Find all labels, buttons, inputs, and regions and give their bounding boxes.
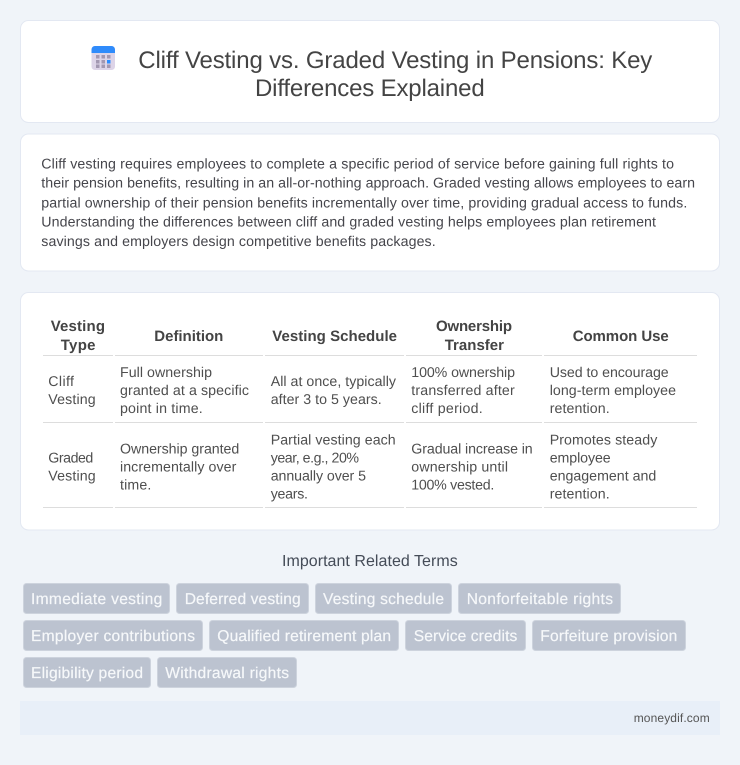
table header row	[51, 318, 669, 354]
table row: graded vesting: incrementally over	[120, 459, 237, 475]
table row: cliff vesting: granted at a specific	[120, 383, 249, 399]
table row: graded vesting: annually over 5	[271, 468, 366, 484]
table row: graded vesting: time.	[120, 477, 151, 493]
table row: graded vesting	[48, 432, 658, 502]
table row: cliff vesting: transferred after	[411, 383, 515, 399]
table row: graded vesting: 100% vested.	[411, 477, 494, 493]
table header row: Type	[61, 337, 96, 354]
table row: graded vesting: employee	[550, 450, 611, 466]
table row: graded vesting: Graded	[48, 450, 93, 466]
text block: summary paragraph: savings and employers design competitive benefits packages.	[41, 234, 436, 250]
text block: summary paragraph: Understanding the differences between cliff and graded vesting helps employees plan retirement	[41, 214, 656, 230]
table row: graded vesting: Partial vesting each	[271, 432, 396, 448]
title: Differences Explained	[255, 75, 485, 102]
table row: cliff vesting: Vesting	[48, 392, 96, 408]
panel: related term tags: Employer contributions	[31, 628, 195, 645]
footer bar	[20, 701, 720, 735]
table row: cliff vesting: 100% ownership	[411, 365, 515, 381]
heading: important related terms: Important Related Terms	[282, 553, 458, 570]
table row: graded vesting: Ownership granted	[120, 441, 239, 457]
table header row: Definition	[154, 328, 223, 345]
table header row: Transfer	[445, 337, 504, 354]
panel: related term tags: Service credits	[414, 628, 518, 645]
table row: cliff vesting: All at once, typically	[271, 374, 397, 390]
panel: related term tags: Vesting schedule	[323, 591, 444, 608]
panel: related term tags: Qualified retirement plan	[217, 628, 391, 645]
table row: cliff vesting	[48, 365, 676, 417]
table row: graded vesting: Promotes steady	[550, 432, 658, 448]
table row: graded vesting: year, e.g., 20%	[271, 450, 359, 466]
table row: graded vesting: years.	[271, 486, 308, 502]
table row: cliff vesting: cliff period.	[411, 401, 483, 417]
panel: introduction	[20, 134, 720, 271]
table row: cliff vesting: retention.	[550, 401, 610, 417]
table row: graded vesting: Gradual increase in	[411, 441, 533, 457]
title: Cliff Vesting vs. Graded Vesting in Pensions: Key	[138, 47, 652, 74]
panel: related term tags: Immediate vesting	[31, 591, 162, 608]
panel: header	[20, 20, 720, 122]
table row: graded vesting: engagement and	[550, 468, 656, 484]
table row: cliff vesting: long-term employee	[550, 383, 676, 399]
text block: summary paragraph: their pension benefits, resulting in an all-or-nothing approach. Graded vesting allows employees to earn	[41, 176, 695, 192]
panel: related term tags	[24, 584, 686, 688]
panel: related term tags: Nonforfeitable rights	[467, 591, 613, 608]
table row: graded vesting: retention.	[550, 486, 610, 502]
table row: cliff vesting: Full ownership	[120, 365, 212, 381]
table row: cliff vesting: after 3 to 5 years.	[271, 392, 382, 408]
panel: comparison table	[20, 292, 720, 530]
footer bar: moneydif.com	[634, 711, 710, 725]
table header row: Ownership	[436, 318, 512, 335]
table row: cliff vesting: Cliff	[48, 374, 74, 390]
text block: summary paragraph: partial ownership of their pension benefits incrementally over time, providing gradual access to funds.	[41, 195, 687, 211]
table header row: Vesting	[51, 318, 105, 335]
text block: summary paragraph	[41, 156, 695, 250]
title	[138, 47, 652, 102]
panel: related term tags: Withdrawal rights	[165, 665, 289, 682]
text block: summary paragraph: Cliff vesting requires employees to complete a specific period of service before gaining full rights to	[41, 156, 674, 172]
table row: graded vesting: ownership until	[411, 459, 508, 475]
table row: graded vesting: Vesting	[48, 468, 96, 484]
panel: related term tags: Forfeiture provision	[540, 628, 677, 645]
panel: related term tags: Deferred vesting	[185, 591, 301, 608]
table row: cliff vesting: point in time.	[120, 401, 203, 417]
panel: related term tags: Eligibility period	[31, 665, 143, 682]
table header row: Vesting Schedule	[272, 328, 397, 345]
table row: cliff vesting: Used to encourage	[550, 365, 669, 381]
table header row: Common Use	[573, 328, 669, 345]
icon: calendar	[92, 46, 115, 70]
